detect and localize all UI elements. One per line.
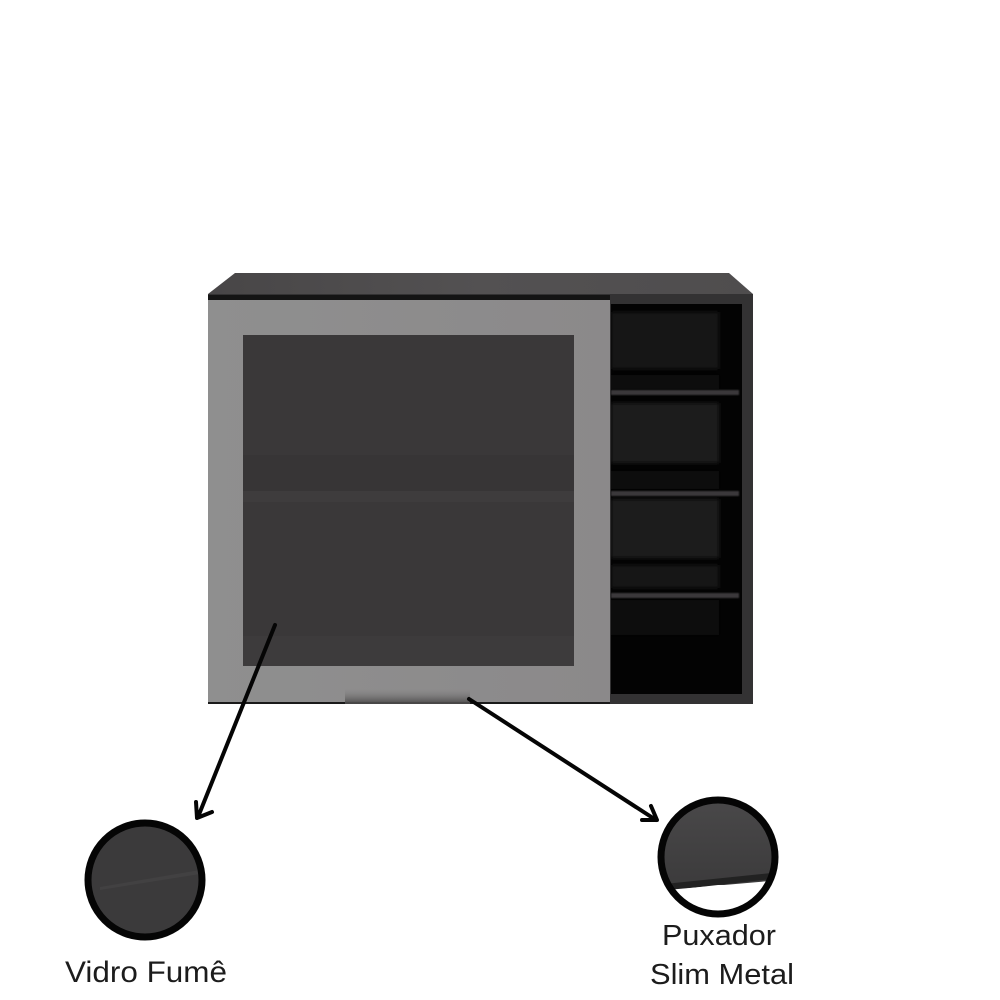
arrow: glass bbox=[196, 625, 275, 818]
open shelves compartment bbox=[611, 304, 742, 694]
front top edge bbox=[208, 295, 610, 300]
cabinet bbox=[208, 273, 753, 704]
label: Puxador Slim Metal: Slim Metal bbox=[650, 959, 794, 991]
cabinet top bbox=[208, 273, 753, 294]
detail circle: smoked glass bbox=[87, 822, 203, 938]
detail circle: slim handle bbox=[658, 796, 778, 918]
label: Vidro Fumê: Vidro Fumê bbox=[65, 956, 227, 989]
label: Puxador Slim Metal: Puxador bbox=[662, 920, 776, 952]
shelf 3 bbox=[611, 593, 739, 598]
shelf 1 bbox=[611, 390, 739, 395]
door bottom edge bbox=[208, 702, 610, 704]
glass door frame bbox=[208, 300, 610, 703]
cabinet body bbox=[208, 294, 753, 704]
label: Puxador Slim Metal bbox=[650, 920, 794, 991]
smoked glass panel bbox=[243, 335, 574, 666]
shelf 2 bbox=[611, 491, 739, 496]
arrow: handle bbox=[469, 699, 657, 820]
slim metal handle bbox=[345, 688, 470, 704]
